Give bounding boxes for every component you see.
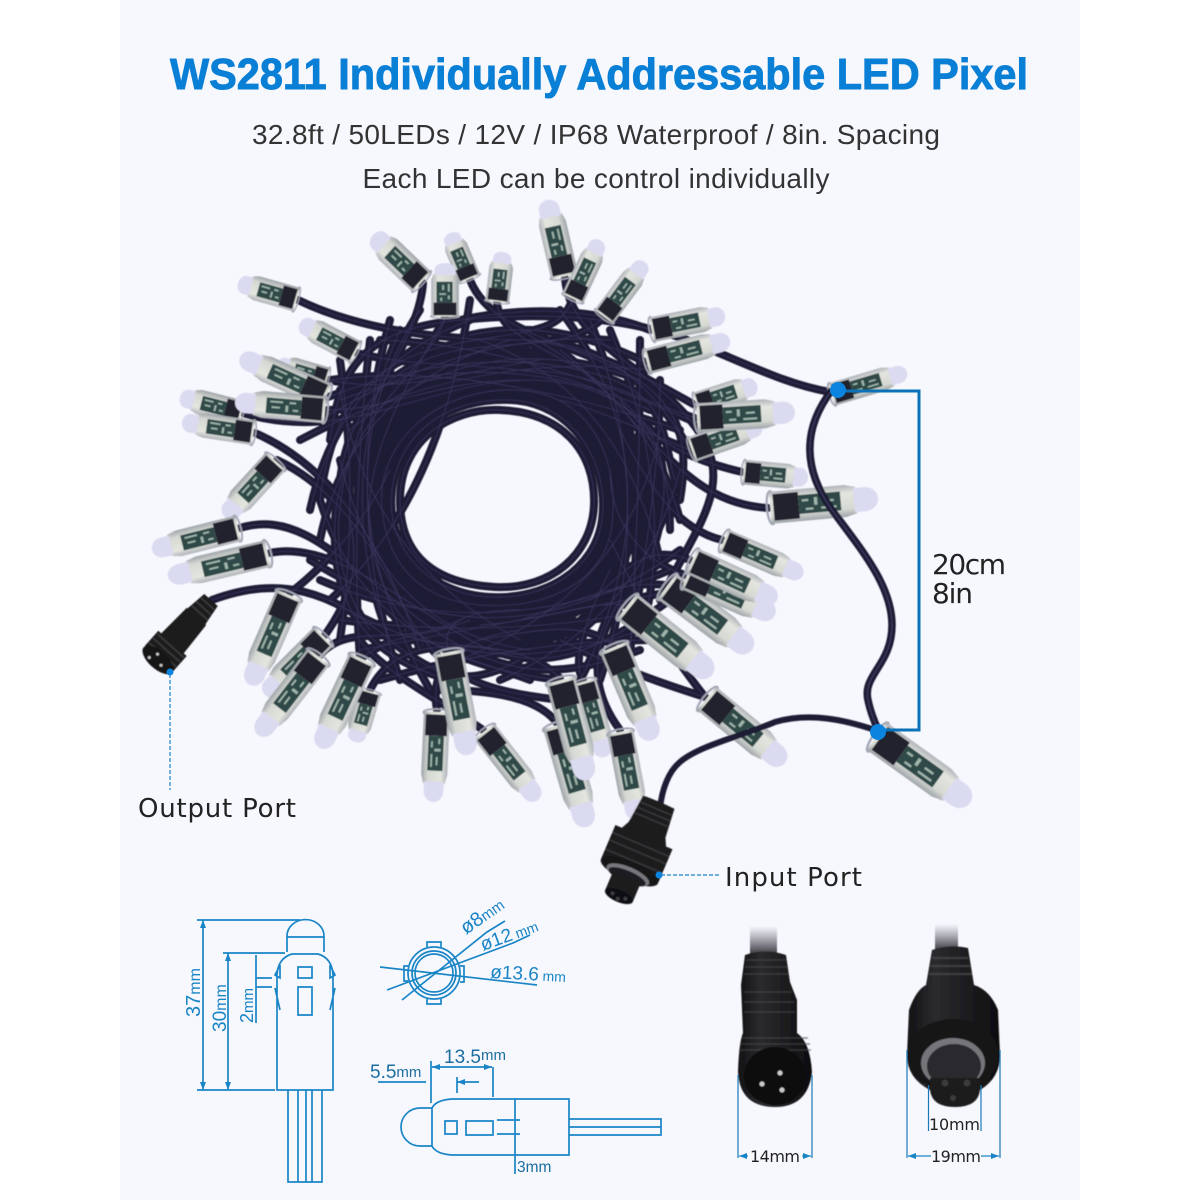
LED string photo: wires, pixels and connectors bbox=[138, 197, 980, 914]
label: 5.5mm: mm bbox=[396, 1064, 421, 1081]
diagram: pixel top view bbox=[370, 1047, 661, 1176]
diagram: pixel cross section bbox=[380, 893, 567, 1004]
subtitle: specifications: 32.8ft / 50LEDs / 12V / IP68 Waterproof / 8in. Spacing bbox=[252, 119, 940, 150]
title: WS2811 Individually Addressable LED Pixel bbox=[170, 50, 1028, 99]
label: 13.5mm: 13.5 bbox=[444, 1047, 481, 1068]
pixel outline bbox=[275, 920, 335, 1182]
wire bundle bbox=[212, 278, 830, 730]
label: 5.5mm: 5.5 bbox=[370, 1062, 396, 1083]
label: 30mm: 30mm bbox=[210, 984, 231, 1032]
subtitle: individual control: Each LED can be control individually bbox=[362, 163, 830, 194]
input connector bbox=[588, 790, 688, 914]
label: 8in: 8in bbox=[932, 577, 973, 610]
callout: input port bbox=[656, 863, 862, 893]
callout: output port bbox=[138, 668, 296, 824]
14mm dimension bbox=[738, 1075, 812, 1166]
loose wire between the two measured pixels bbox=[660, 390, 892, 808]
19mm and 10mm dimensions: 10mm bbox=[929, 1115, 980, 1134]
19mm and 10mm dimensions: 19mm bbox=[931, 1147, 981, 1166]
panel: background bbox=[120, 0, 1080, 1200]
label: diameter 12mm: ø12 mm bbox=[478, 915, 541, 956]
label: 2mm: 2mm bbox=[237, 988, 257, 1023]
callout: output port: Output Port bbox=[138, 794, 296, 824]
photo: male connector bbox=[738, 926, 812, 1107]
bracket: 20cm spacing bbox=[830, 382, 919, 740]
callout: input port: Input Port bbox=[725, 863, 862, 893]
LED pixels on the string bbox=[149, 197, 980, 831]
label: 3mm: 3mm bbox=[517, 1159, 551, 1176]
label: 20cm: 20cm bbox=[932, 548, 1006, 581]
output connector bbox=[138, 587, 225, 679]
14mm dimension: 14mm bbox=[750, 1147, 800, 1166]
dimension lines bbox=[197, 920, 300, 1090]
label: diameter 8mm: ø8mm bbox=[456, 893, 508, 939]
label: 37mm: 37mm bbox=[183, 968, 205, 1017]
label: 13.5mm: mm bbox=[481, 1047, 506, 1064]
19mm and 10mm dimensions bbox=[907, 1050, 1000, 1166]
label: diameter 13.6mm: ø13.6 mm bbox=[490, 962, 567, 987]
photo: female connector bbox=[907, 924, 1000, 1107]
diagram: pixel side dimensions bbox=[183, 920, 335, 1182]
